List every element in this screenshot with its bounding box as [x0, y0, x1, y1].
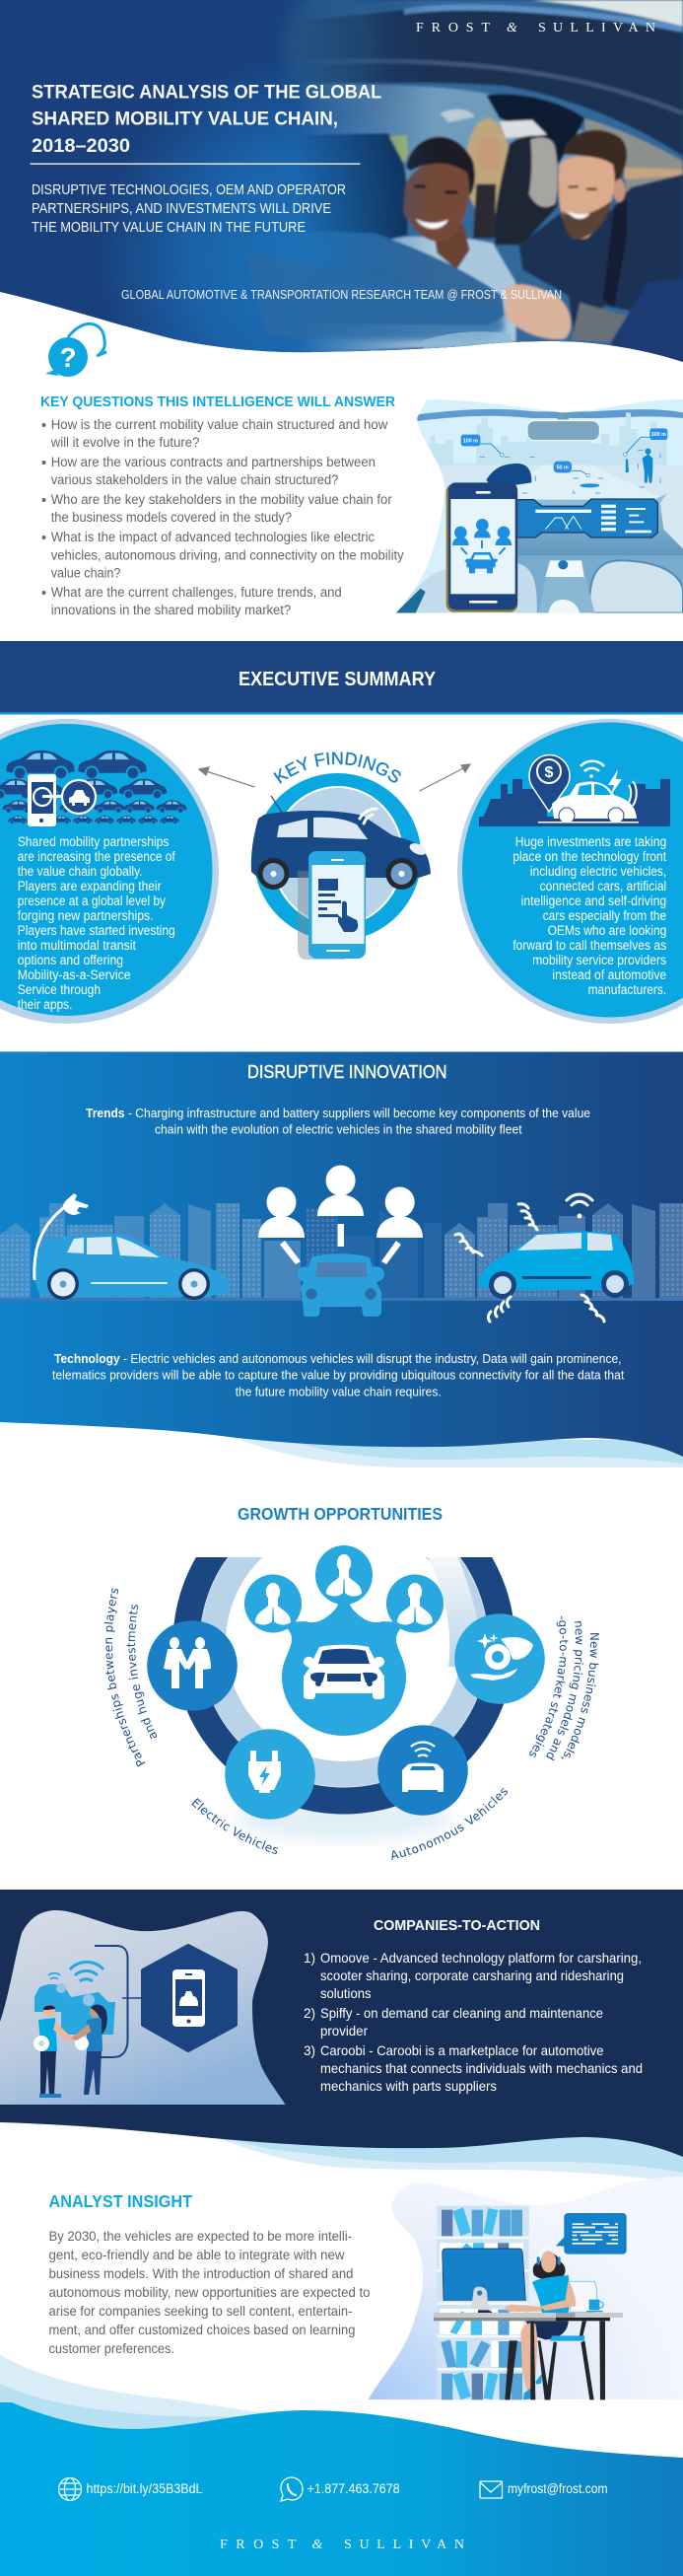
arrow: to right circle — [420, 764, 470, 791]
company list: Omoove - Advanced technology platform for carsharing, — [320, 1951, 642, 1966]
icon: autonomous vehicle — [377, 1725, 468, 1816]
hero photo background — [0, 0, 683, 365]
text: trends: chain with the evolution of electric vehicles in the shared mobility fleet — [155, 1122, 522, 1136]
logo: Frost & Sullivan footer — [220, 2538, 464, 2552]
text: trends: Trends - Charging infrastructure and battery suppliers will become key components of the value — [86, 1106, 590, 1120]
heading: key findings curved: KEY FINDINGS — [273, 751, 401, 784]
text: partnerships: are increasing the presence of — [18, 849, 175, 864]
chair — [569, 2281, 597, 2312]
icon: navy car — [251, 796, 431, 890]
arrow: to left circle — [199, 767, 254, 787]
text: investments: cars especially from the — [543, 908, 666, 923]
heading: growth opportunities: GROWTH OPPORTUNITIES — [238, 1504, 443, 1524]
company list: provider — [320, 2024, 368, 2039]
question list: various stakeholders in the value chain structured? — [51, 472, 338, 487]
monitor — [443, 2249, 525, 2313]
title: SHARED MOBILITY VALUE CHAIN, — [32, 108, 338, 130]
icon: phone with hand — [298, 851, 366, 960]
label: new business models — [529, 1615, 599, 1761]
text: investments: forward to call themselves as — [512, 938, 666, 953]
text: investments: intelligence and self-driving — [521, 894, 666, 908]
company list: mechanics that connects individuals with mechanics and — [320, 2061, 643, 2076]
icon: connected autonomous car — [455, 1194, 634, 1322]
panel: key findings centre — [197, 751, 471, 960]
logo: Frost & Sullivan — [416, 21, 655, 36]
text: partnerships: Mobility-as-a-Service — [18, 967, 131, 982]
panel: executive summary header band — [0, 641, 683, 714]
label: new business models: -go-to-market strategies — [529, 1615, 568, 1757]
man figure — [34, 2005, 77, 2098]
panel: left finding circle — [0, 719, 219, 1024]
heading: analyst insight: ANALYST INSIGHT — [49, 2191, 192, 2211]
illustration: car dashboard and phone: 300 m — [651, 432, 666, 438]
icon: partnership handshake — [147, 1620, 238, 1711]
analyst body text: gent, eco-friendly and be able to integrate with new — [49, 2248, 345, 2262]
question list: will it evolve in the future? — [50, 435, 199, 450]
icon: investment pin, car and skyline — [479, 755, 670, 826]
contact: website — [59, 2477, 203, 2501]
question list: Who are the key stakeholders in the mobility value chain for — [51, 492, 392, 507]
speech bubble — [556, 2213, 627, 2254]
panel: growth opportunities — [104, 1504, 599, 1860]
logo: Frost & Sullivan: & — [507, 21, 517, 36]
illustration: connected cars and partners — [0, 1910, 286, 2105]
icon: investment pin, car and skyline: $ — [545, 764, 554, 781]
panel: footer — [0, 2355, 683, 2576]
analyst body text: customer preferences. — [49, 2341, 174, 2356]
question list: How is the current mobility value chain structured and how — [51, 417, 388, 432]
analyst body text: autonomous mobility, new opportunities are expected to — [49, 2285, 371, 2300]
illustration: car dashboard and phone — [394, 394, 683, 618]
logo: Frost & Sullivan footer: FROST — [220, 2538, 297, 2552]
text: investments: instead of automotive — [552, 967, 666, 982]
company list: Caroobi - Caroobi is a marketplace for automotive — [320, 2043, 603, 2058]
analyst body text: business models. With the introduction of shared and — [49, 2266, 353, 2281]
company list: 1) — [304, 1951, 315, 1966]
logo: Frost & Sullivan: FROST — [416, 21, 490, 36]
desk — [434, 2300, 623, 2399]
analyst body text: arise for companies seeking to sell content, entertain- — [49, 2304, 353, 2319]
icon: electric plug — [225, 1729, 315, 1820]
text: technology: Technology - Electric vehicles and autonomous vehicles will disrupt the industry, Data will gain prominence, — [54, 1351, 621, 1366]
title: STRATEGIC ANALYSIS OF THE GLOBAL — [32, 81, 381, 103]
logo: Frost & Sullivan: SULLIVAN — [538, 21, 655, 36]
icon: electric car and plug — [34, 1193, 231, 1300]
illustration background blob — [369, 2177, 683, 2399]
heading: disruptive innovation: DISRUPTIVE INNOVATION — [247, 1062, 447, 1082]
title: 2018–2030 — [32, 135, 130, 157]
question list: What is the impact of advanced technologies like electric — [51, 530, 375, 544]
analyst body text: ment, and offer customized choices based on learning — [49, 2323, 355, 2337]
analyst body text — [49, 2229, 371, 2356]
text: partnerships: Players have started investing — [18, 923, 175, 938]
icon: question bubbles — [45, 323, 106, 377]
logo: Frost & Sullivan footer: SULLIVAN — [344, 2538, 464, 2552]
text: investments: mobility service providers — [532, 953, 666, 967]
text: investments: connected cars, artificial — [540, 879, 666, 894]
question list: What are the current challenges, future trends, and — [51, 585, 342, 600]
text: investments: Huge investments are taking — [515, 834, 666, 849]
text: partnerships: forging new partnerships. — [18, 908, 154, 923]
question list: innovations in the shared mobility market? — [51, 603, 291, 617]
woman — [505, 2248, 576, 2399]
company list: 2) — [304, 2006, 315, 2021]
text: partnerships: Players are expanding their — [18, 879, 162, 894]
company list: mechanics with parts suppliers — [320, 2079, 497, 2094]
panel: right finding circle — [457, 719, 683, 1024]
subtitle: DISRUPTIVE TECHNOLOGIES, OEM AND OPERATOR — [32, 182, 346, 198]
text: technology — [52, 1351, 625, 1399]
company list: Spiffy - on demand car cleaning and maintenance — [320, 2006, 603, 2021]
woman figure — [71, 2005, 107, 2095]
contact: website: https://bit.ly/35B3BdL — [87, 2481, 203, 2496]
text: trends — [86, 1106, 590, 1136]
logo: Frost & Sullivan footer: & — [311, 2538, 323, 2552]
label: electric vehicles: Electric Vehicles — [191, 1798, 278, 1854]
contact: phone — [281, 2477, 400, 2501]
text: partnerships: Shared mobility partnerships — [18, 834, 170, 849]
text: investments: place on the technology front — [512, 849, 666, 864]
contact: email: myfrost@frost.com — [508, 2481, 607, 2496]
icon: rows of cars with phone — [0, 751, 186, 826]
text: partnerships: presence at a global level by — [18, 894, 166, 908]
company list: solutions — [320, 1986, 372, 2001]
text: investments: OEMs who are looking — [548, 923, 666, 938]
company list — [304, 1951, 643, 2094]
question list: value chain? — [51, 566, 120, 580]
analyst body text: By 2030, the vehicles are expected to be more intelli- — [49, 2229, 352, 2244]
foreground arm and blouse blending into the blue — [246, 251, 505, 340]
centre blob: shared car and people — [244, 1545, 444, 1736]
heading: key questions: KEY QUESTIONS THIS INTELLIGENCE WILL ANSWER — [40, 394, 395, 410]
label: autonomous vehicles: Autonomous Vehicles — [391, 1788, 508, 1860]
text: partnerships — [18, 834, 175, 1012]
illustration: car dashboard and phone: 100 m — [463, 438, 478, 444]
text: partnerships: into multimodal transit — [18, 938, 136, 953]
heading: companies to action: COMPANIES-TO-ACTION — [374, 1917, 540, 1934]
panel: companies to action — [0, 1890, 683, 2182]
text: partnerships: the value chain globally. — [18, 864, 143, 879]
phone with mobility icons — [446, 482, 517, 612]
panel: hero — [0, 0, 683, 365]
company list: scooter sharing, corporate carsharing and ridesharing — [320, 1968, 624, 1983]
text: technology: telematics providers will be able to capture the value by providing ubiquitous connectivity for all the data that — [52, 1368, 625, 1383]
illustration: analyst at desk — [434, 2206, 627, 2399]
label: partnerships between players: Partnerships between players — [104, 1588, 146, 1767]
icon: shared mobility people and car — [258, 1166, 423, 1317]
subtitle: THE MOBILITY VALUE CHAIN IN THE FUTURE — [32, 220, 306, 236]
panel: disruptive innovation — [0, 1051, 683, 1467]
icon: business model gear in hand — [454, 1613, 545, 1704]
contact: phone: +1.877.463.7678 — [307, 2481, 400, 2496]
text: investments: manufacturers. — [588, 982, 666, 997]
panel: key questions — [40, 394, 404, 617]
text: partnerships: Service through — [18, 982, 101, 997]
question list: the business models covered in the study? — [51, 510, 292, 525]
icon: question bubbles: ? — [59, 342, 77, 373]
label: partnerships between players: and huge investments — [126, 1604, 158, 1740]
text: investments: including electric vehicles, — [530, 864, 666, 879]
research team credit: GLOBAL AUTOMOTIVE & TRANSPORTATION RESEARCH TEAM @ FROST & SULLIVAN — [121, 288, 562, 302]
question list — [41, 417, 404, 617]
text: partnerships: options and offering — [18, 953, 123, 967]
label: new business models: New business models, — [561, 1633, 599, 1759]
contact: email — [480, 2481, 607, 2498]
panel: analyst insight — [49, 2177, 683, 2399]
ring diagram — [147, 1545, 545, 1846]
text: technology: the future mobility value chain requires. — [236, 1385, 442, 1399]
subtitle: PARTNERSHIPS, AND INVESTMENTS WILL DRIVE — [32, 201, 331, 217]
text: partnerships: their apps. — [18, 997, 72, 1012]
label: new business models: new pricing models and — [546, 1621, 583, 1761]
company list: 3) — [304, 2043, 315, 2058]
heading: executive summary: EXECUTIVE SUMMARY — [239, 669, 437, 690]
ring — [254, 773, 422, 941]
text: investments — [512, 834, 666, 997]
skyline — [0, 1203, 683, 1301]
question list: vehicles, autonomous driving, and connectivity on the mobility — [51, 548, 404, 562]
illustration: car dashboard and phone: 50 m — [557, 465, 569, 470]
question list: How are the various contracts and partnerships between — [51, 455, 376, 469]
